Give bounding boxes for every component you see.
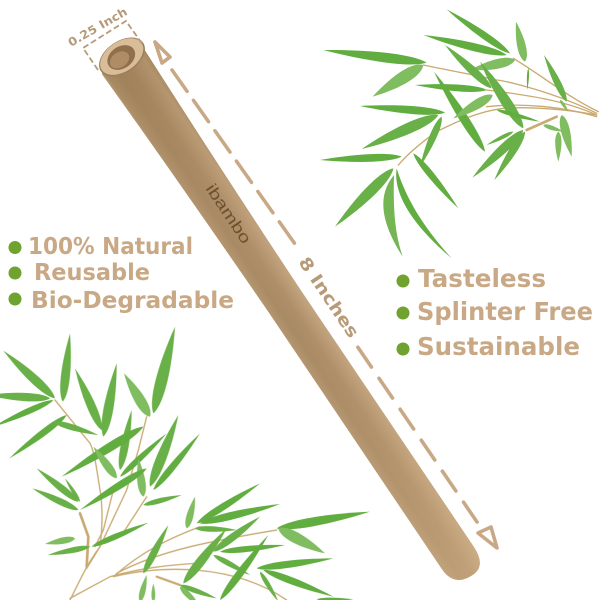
bamboo branch: bottom left — [0, 325, 371, 600]
arrowhead: top — [155, 42, 170, 63]
feature: tasteless: Tasteless — [418, 264, 546, 293]
feature: splinter free: Splinter Free — [417, 297, 593, 326]
feature: sustainable: Sustainable — [417, 332, 580, 361]
feature list: right — [396, 264, 593, 361]
feature: 100% natural: 100% Natural — [28, 234, 193, 260]
bamboo straw — [91, 29, 493, 590]
straw body — [102, 46, 491, 590]
length label: 8 Inches — [294, 254, 362, 342]
diameter bracket — [83, 21, 143, 70]
bamboo branch: top right — [320, 6, 598, 258]
branch stems — [55, 400, 287, 600]
feature list: left — [8, 234, 234, 314]
branch stems — [398, 58, 598, 165]
leaves — [0, 325, 371, 600]
straw open end — [92, 29, 152, 85]
feature: reusable: Reusable — [34, 260, 150, 286]
brand mark on straw: ibambo — [202, 181, 254, 247]
arrowhead: bottom — [478, 527, 497, 548]
diameter label: 0.25 Inch — [66, 4, 130, 50]
length arrow — [155, 42, 497, 548]
leaves — [320, 6, 576, 258]
feature: bio-degradable: Bio-Degradable — [31, 288, 234, 314]
